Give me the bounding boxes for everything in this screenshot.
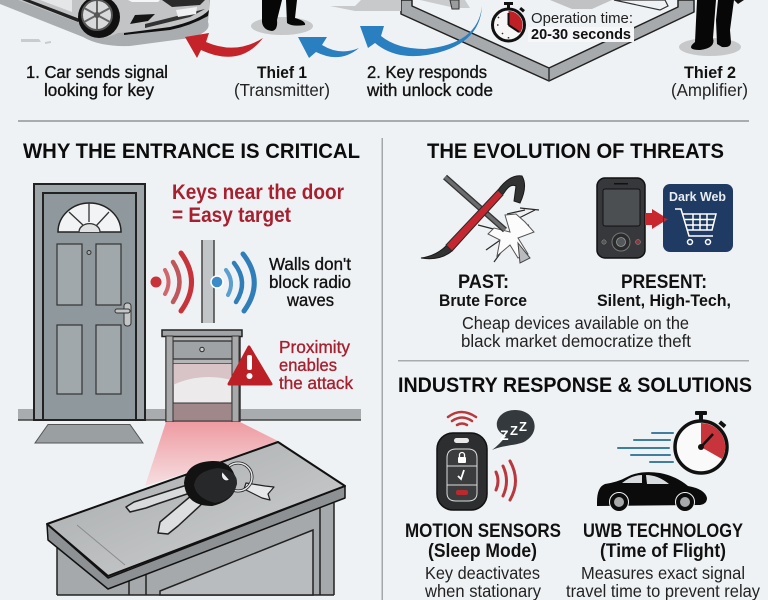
panel: industry response and solutions <box>398 373 760 600</box>
icon: thief 2 <box>679 0 744 56</box>
icon: warning triangle <box>229 347 271 384</box>
label: walls don't block radio waves: block radio <box>269 272 351 292</box>
label: motion sensors <box>405 521 561 600</box>
label: uwb technology: Measures exact signal <box>581 563 745 583</box>
label: car signal: 1. Car sends signal <box>26 62 168 82</box>
icon: car keys <box>126 461 274 534</box>
callout: keys near the door <box>172 181 344 227</box>
callout: proximity enables the attack: the attack <box>279 373 353 393</box>
arrow: key response <box>360 6 482 56</box>
text: cheap devices: black market democratize theft <box>461 331 691 351</box>
icon: key fob with sleep mode: Z <box>510 423 518 438</box>
icon: dark web cart: Dark Web <box>669 189 726 204</box>
arrow: to dark web <box>645 209 668 229</box>
label: operation time: Operation time: <box>531 10 633 27</box>
icon: key fob with sleep mode <box>437 410 535 510</box>
panel: relay attack scene <box>0 0 748 100</box>
callout: proximity enables the attack: enables <box>279 355 337 375</box>
label: walls don't block radio waves: waves <box>286 290 334 310</box>
label: thief 2 <box>671 63 748 100</box>
label: operation time <box>528 10 634 43</box>
label: thief 2: (Amplifier) <box>671 80 748 100</box>
label: thief 1: (Transmitter) <box>234 80 330 100</box>
label: past brute force <box>439 272 527 310</box>
label: motion sensors: Key deactivates <box>425 563 540 583</box>
icon: hall table closeup <box>47 442 345 595</box>
baseboard <box>18 409 361 420</box>
icon: thief 1 <box>251 0 313 35</box>
icon: stopwatch with car <box>597 411 727 512</box>
label: key responds: with unlock code <box>366 80 493 100</box>
icon: door <box>34 184 145 420</box>
callout: keys near the door: = Easy target <box>172 204 291 227</box>
callout: proximity enables the attack <box>279 337 353 393</box>
label: operation time: 20-30 seconds <box>531 26 631 43</box>
icon: wall with radio waves <box>150 240 254 323</box>
icon: crowbar and broken glass <box>421 176 539 263</box>
label: present silent high-tech: Silent, High-Tech, <box>597 291 731 310</box>
label: motion sensors: MOTION SENSORS <box>405 521 561 542</box>
label: present silent high-tech <box>597 272 731 310</box>
label: thief 2: Thief 2 <box>684 63 736 82</box>
callout: proximity enables the attack: Proximity <box>279 337 350 357</box>
icon: phone device <box>597 178 645 258</box>
label: uwb technology: UWB TECHNOLOGY <box>583 521 743 542</box>
label: uwb technology <box>566 521 760 600</box>
label: past brute force: PAST: <box>458 272 509 293</box>
icon: car <box>0 0 210 46</box>
heading: why the entrance is critical: WHY THE ENTRANCE IS CRITICAL <box>23 139 360 163</box>
arrow: car signal to thief 1 <box>185 33 263 58</box>
icon: key fob with sleep mode: Z <box>500 427 509 443</box>
text: cheap devices <box>461 313 691 351</box>
label: past brute force: Brute Force <box>439 291 527 310</box>
panel: evolution of threats <box>421 139 733 351</box>
icon: key fob with sleep mode: Z <box>519 419 527 434</box>
icon: stopwatch <box>492 2 525 41</box>
label: walls don't block radio waves: Walls don't <box>269 254 351 274</box>
text: cheap devices: Cheap devices available on the <box>462 313 689 333</box>
callout: keys near the door: Keys near the door <box>172 181 344 204</box>
icon: house floor outline <box>330 0 694 81</box>
icon: hall table <box>162 330 242 422</box>
label: key responds <box>366 62 493 100</box>
icon: doormat <box>35 424 143 443</box>
label: uwb technology: (Time of Flight) <box>600 541 726 562</box>
label: motion sensors: (Sleep Mode) <box>428 541 537 562</box>
label: walls don't block radio waves <box>269 254 351 310</box>
label: thief 1: Thief 1 <box>257 63 307 82</box>
heading: the evolution of threats: THE EVOLUTION OF THREATS <box>427 139 724 163</box>
label: car signal: looking for key <box>44 80 154 100</box>
icon: dark web cart <box>663 184 733 252</box>
label: car signal <box>26 62 168 100</box>
arrow: thief 1 to key <box>298 37 359 58</box>
label: present silent high-tech: PRESENT: <box>621 272 707 293</box>
label: key responds: 2. Key responds <box>367 62 487 82</box>
panel: why the entrance is critical <box>18 139 361 595</box>
label: thief 1 <box>234 63 330 100</box>
